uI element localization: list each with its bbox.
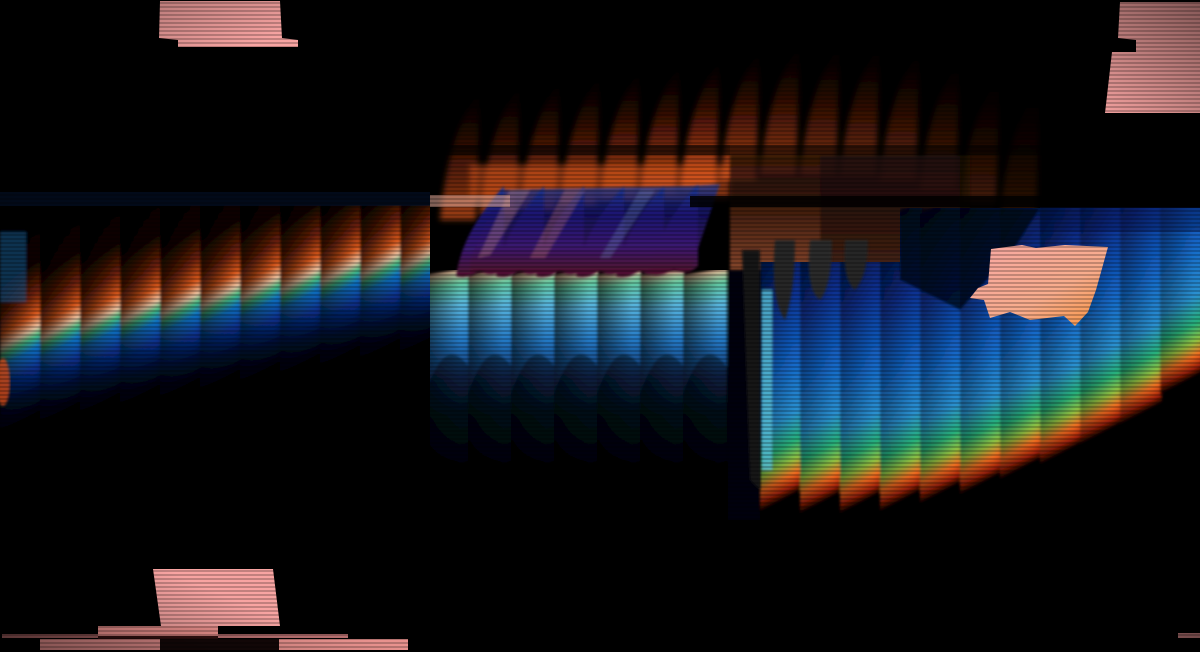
pink block: top right xyxy=(1105,2,1200,113)
purple distorted block xyxy=(456,184,720,277)
upper orange wisps xyxy=(440,45,1040,220)
dark stalactites xyxy=(742,240,868,490)
dark brown block xyxy=(730,155,970,270)
horizontal glitch bars xyxy=(0,145,1200,232)
left edge red spot xyxy=(0,358,10,406)
left rainbow band xyxy=(0,205,430,428)
right cascade xyxy=(758,208,1200,513)
peach block: middle right xyxy=(970,245,1108,326)
centre cascade xyxy=(425,267,760,520)
pink block: bottom left xyxy=(2,569,408,650)
pink fragment: bottom right xyxy=(1178,633,1200,638)
pink block: top left xyxy=(159,1,298,47)
